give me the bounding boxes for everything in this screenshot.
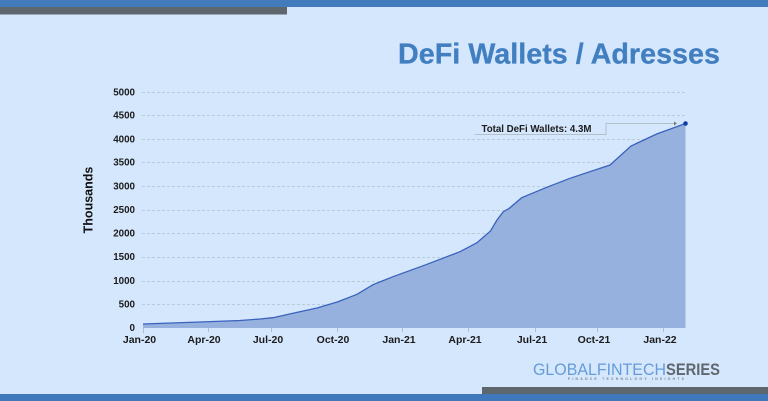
x axis labels: Jul-21 bbox=[517, 334, 547, 346]
y axis labels: 2500 bbox=[113, 205, 136, 216]
y axis labels: 1500 bbox=[113, 252, 136, 263]
filled area bbox=[143, 124, 686, 328]
x axis labels: Oct-20 bbox=[317, 334, 349, 346]
latest data point bbox=[683, 121, 688, 126]
y axis labels: 3500 bbox=[113, 158, 136, 168]
title: DeFi Wallets / Adresses bbox=[398, 38, 720, 70]
x axis labels: Apr-20 bbox=[187, 334, 221, 346]
x axis ticks bbox=[144, 328, 664, 333]
top blue band bbox=[0, 0, 768, 7]
y axis labels: 2000 bbox=[113, 228, 136, 240]
x axis labels: Apr-21 bbox=[448, 334, 482, 346]
y axis labels: 4000 bbox=[113, 134, 136, 146]
y axis labels: 3000 bbox=[113, 182, 136, 192]
y axis labels: 500 bbox=[119, 300, 136, 310]
x axis labels bbox=[123, 334, 677, 346]
y axis labels bbox=[113, 88, 136, 334]
top grey bar bbox=[0, 7, 287, 14]
data line bbox=[143, 124, 686, 324]
y axis title: Thousands bbox=[81, 167, 95, 233]
logo: Global Fintech Series: GLOBALFINTECH bbox=[533, 361, 666, 379]
x axis labels: Oct-21 bbox=[578, 334, 610, 346]
logo: Global Fintech Series: SERIES bbox=[666, 361, 720, 379]
callout: total DeFi wallets: Total DeFi Wallets: 4.3M bbox=[482, 123, 592, 135]
logo: Global Fintech Series bbox=[533, 361, 720, 381]
bottom grey bar bbox=[482, 387, 768, 394]
y axis labels: 1000 bbox=[113, 276, 136, 287]
chart: DeFi wallets area chart bbox=[81, 88, 688, 346]
y axis labels: 0 bbox=[130, 323, 136, 334]
logo: Global Fintech Series: FINANCE TECHNOLOGY INSIGHTS bbox=[568, 377, 685, 381]
x axis labels: Jan-22 bbox=[643, 334, 677, 346]
x axis labels: Jul-20 bbox=[253, 334, 283, 346]
y axis labels: 5000 bbox=[113, 88, 136, 98]
y axis labels: 4500 bbox=[113, 110, 136, 122]
x axis labels: Jan-20 bbox=[123, 334, 156, 346]
x axis labels: Jan-21 bbox=[382, 334, 416, 346]
bottom blue band bbox=[0, 394, 768, 401]
callout: total DeFi wallets bbox=[475, 122, 677, 135]
